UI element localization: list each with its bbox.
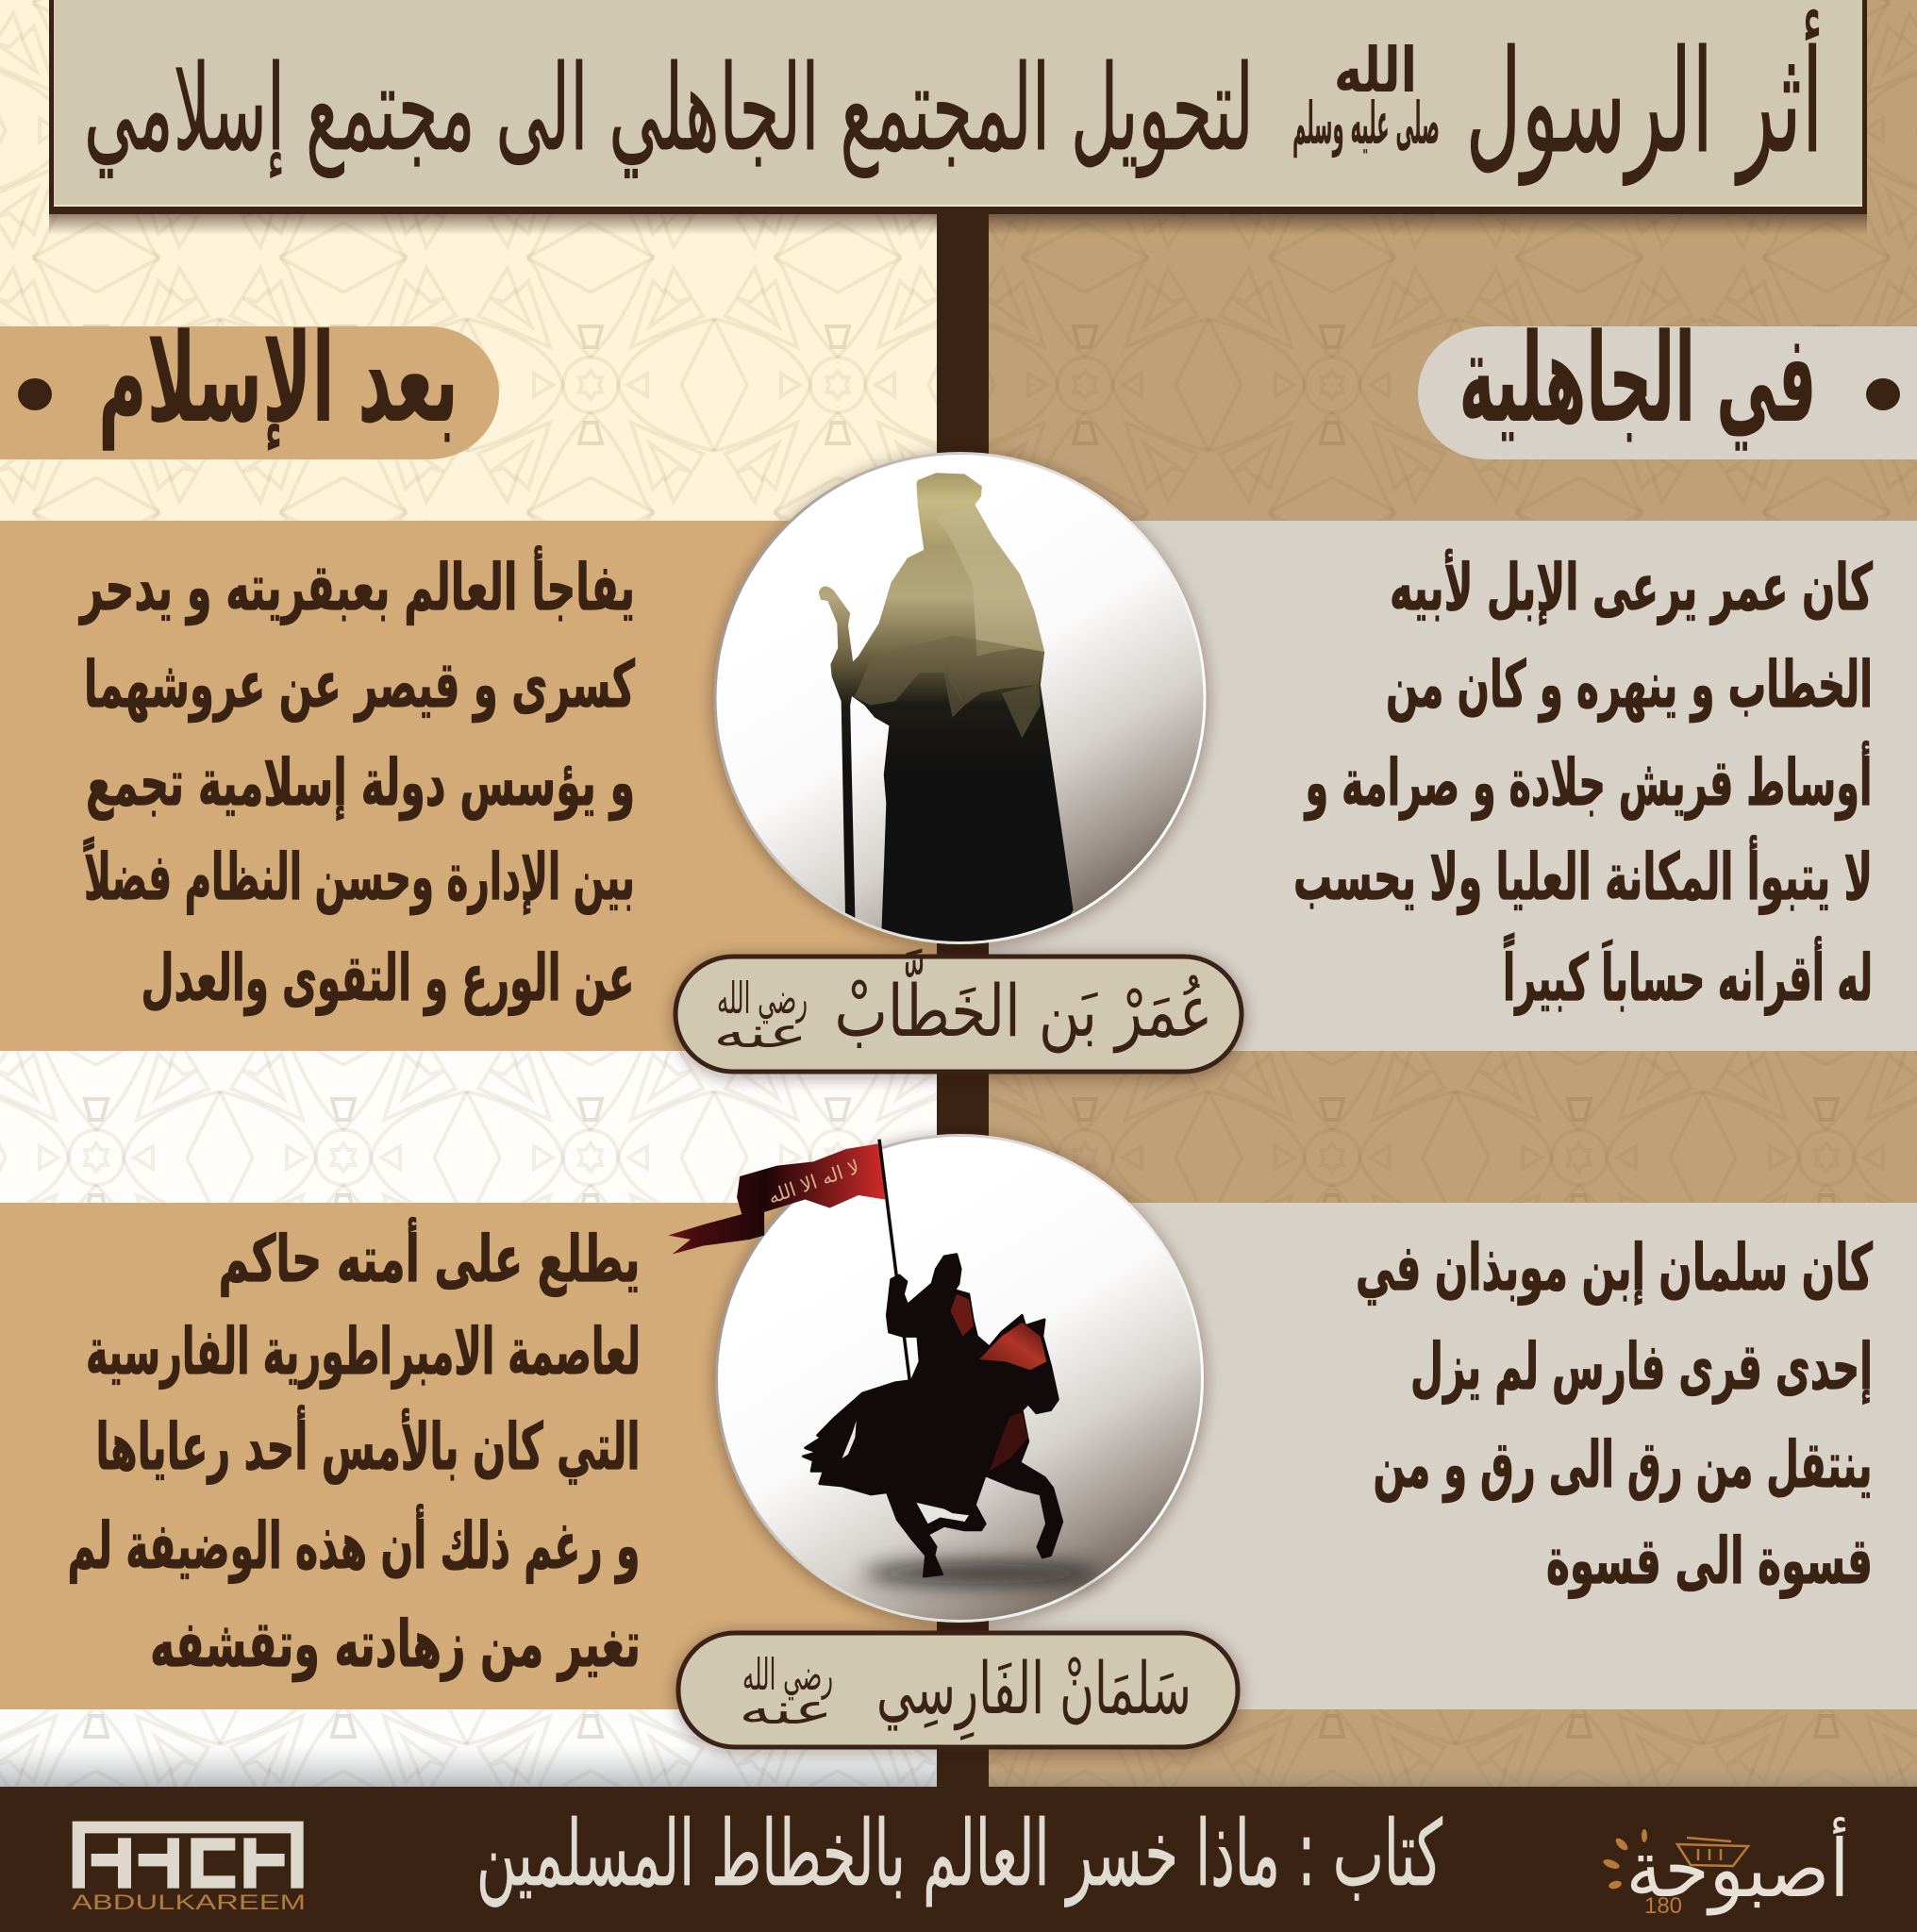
title banner xyxy=(49,0,1867,214)
text block: Omar before Islam xyxy=(1293,548,1873,1016)
panel: after Islam text row 1 xyxy=(0,521,937,1051)
bullet xyxy=(1866,378,1900,410)
logo: Abdulkareem: ABDULKAREEM xyxy=(72,1890,306,1914)
pill: after Islam xyxy=(0,307,499,459)
banner: لا اله الا الله xyxy=(765,1155,862,1208)
honorific calligraphy: الله xyxy=(1334,34,1417,107)
name pill: Omar xyxy=(675,947,1242,1072)
honorific: رضي الله xyxy=(717,973,808,1024)
horse and rider xyxy=(803,1255,1062,1576)
text block: Salman before Islam xyxy=(1356,1231,1873,1599)
pill: before Islam xyxy=(1418,307,1917,459)
text block: Salman after Islam: التي كان بالأمس أحد رعاياها xyxy=(96,1405,640,1485)
logo: Osbouha 180: 180 xyxy=(1644,1893,1682,1919)
honorific: عنه xyxy=(739,1686,833,1734)
text block: Omar after Islam: يفاجأ العالم بعبقريته و يدحر xyxy=(78,545,635,625)
text block: Omar after Islam: كسرى و قيصر عن عروشهما xyxy=(84,648,635,723)
honorific xyxy=(713,973,808,1058)
text block: Omar after Islam xyxy=(78,545,635,1016)
text block: Salman after Islam: لعاصمة الامبراطورية الفارسية xyxy=(86,1315,641,1390)
panel: after Islam text row 2 xyxy=(0,1203,937,1709)
figure silhouette: Omar with staff xyxy=(819,473,1074,951)
flag pole xyxy=(879,1140,910,1383)
panel: before Islam text row 1 xyxy=(989,521,1917,1051)
logo: Osbouha 180: أصبوحة xyxy=(1626,1817,1849,1916)
text block: Salman after Islam: تغير من زهادته وتقشفه xyxy=(150,1607,641,1682)
ground shadow xyxy=(863,1563,1099,1584)
panel: right background (before Islam) xyxy=(989,0,1917,1787)
text block: Omar after Islam: عن الورع و التقوى والعدل xyxy=(142,941,634,1016)
header shadow xyxy=(49,214,1867,235)
footer xyxy=(0,1787,1917,1932)
central divider bar xyxy=(937,214,989,1787)
portrait circle: Salman xyxy=(668,1134,1204,1623)
banner xyxy=(668,1143,885,1255)
logo: Abdulkareem xyxy=(72,1822,306,1914)
honorific: رضي الله xyxy=(742,1649,833,1701)
name text: عُمَرْ بَن الخَطَّابْ xyxy=(834,947,1213,1054)
title banner: صلى عليه وسلم xyxy=(1292,89,1440,158)
text block: Salman after Islam: يطلع على أمته حاكم xyxy=(219,1217,640,1297)
horse and rider silhouette with banner xyxy=(668,1140,1062,1576)
name pill: Salman xyxy=(678,1633,1238,1747)
bullet xyxy=(18,378,52,410)
text block: Salman after Islam xyxy=(68,1217,641,1682)
name text: سَلمَانْ الفَارِسِي xyxy=(876,1646,1192,1741)
panel: left background (after Islam) xyxy=(0,0,937,1787)
honorific: عنه xyxy=(713,1009,808,1058)
portrait circle: Omar xyxy=(713,452,1206,951)
text block: Omar after Islam: و يؤسس دولة إسلامية تجمع xyxy=(86,746,635,821)
heading: after Islam: بعد الإسلام xyxy=(98,307,458,451)
honorific xyxy=(739,1649,833,1734)
panel: before Islam text row 2 xyxy=(989,1203,1917,1709)
honorific calligraphy xyxy=(1292,34,1440,158)
text block: Salman after Islam: و رغم ذلك أن هذه الوضيفة لم xyxy=(68,1504,640,1584)
text block: Omar after Islam: بين الإدارة وحسن النظام فضلاً xyxy=(83,836,635,915)
